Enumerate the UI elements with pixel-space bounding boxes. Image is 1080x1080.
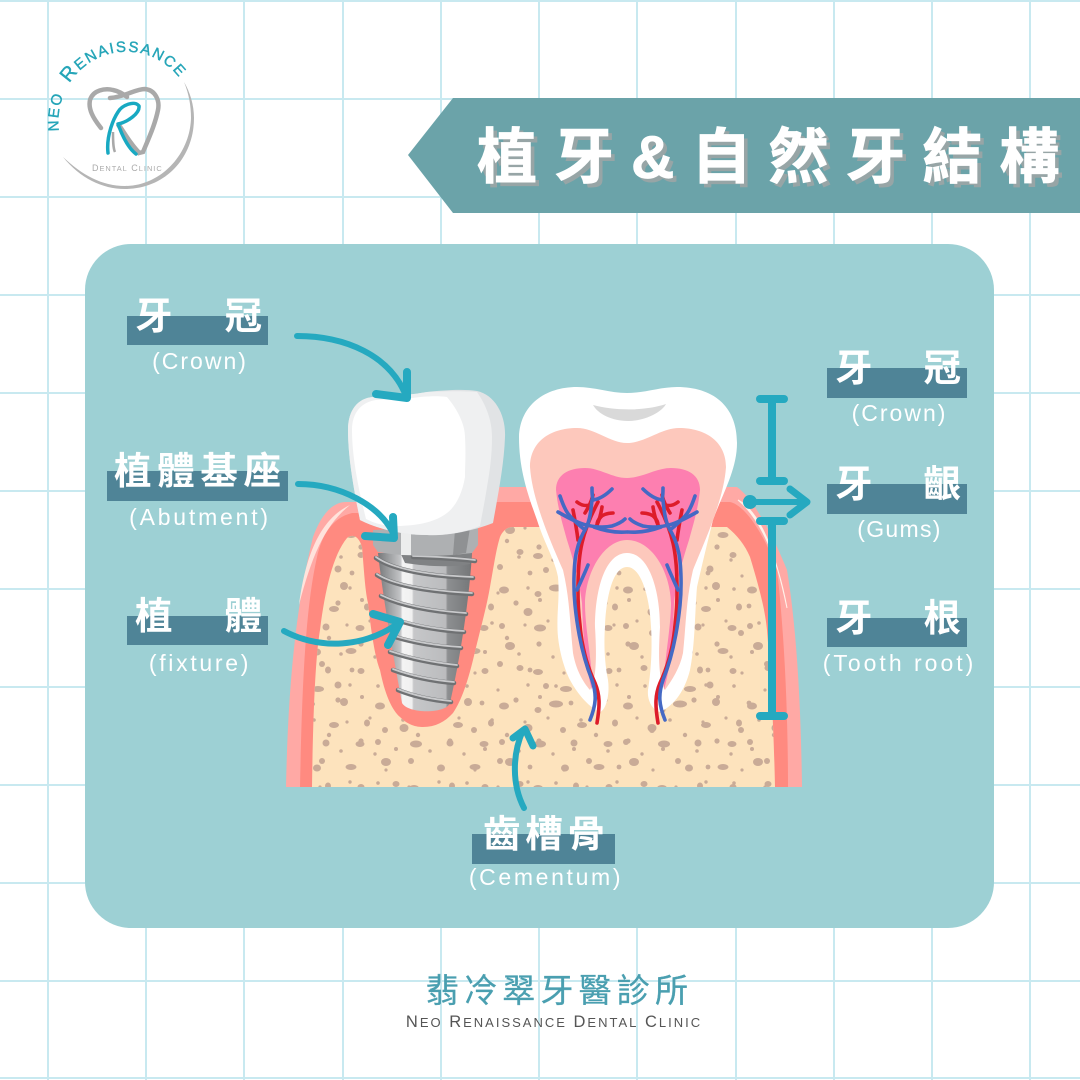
logo: Neo Renaissance Dental Clinic: NEO RENAISSANCE xyxy=(48,41,186,130)
label: cementum: 槽 xyxy=(525,813,563,855)
title banner: 植牙&自然牙結構 xyxy=(481,128,1080,195)
arrow: fixture xyxy=(284,614,400,645)
implant fixture xyxy=(376,552,475,711)
main panel xyxy=(85,244,994,928)
label: crown (right): 牙 xyxy=(835,347,872,389)
label: abutment: 體 xyxy=(157,450,195,492)
arrow: abutment xyxy=(298,484,394,538)
label: cementum: 齒 xyxy=(483,813,520,855)
label: cementum xyxy=(469,813,623,890)
label: crown (right) xyxy=(827,347,967,426)
implant abutment xyxy=(373,525,478,556)
label: tooth root xyxy=(823,597,976,676)
label: crown (right): (Crown) xyxy=(852,400,947,426)
label: cementum: 骨 xyxy=(568,813,605,855)
label: abutment xyxy=(107,450,288,530)
label: crown (right): 冠 xyxy=(924,347,961,389)
label: gums: 齦 xyxy=(924,463,961,505)
enamel xyxy=(519,387,737,712)
gum highlights xyxy=(299,505,350,605)
label: gums: (Gums) xyxy=(857,516,942,542)
pulp xyxy=(556,468,700,690)
label: gums: 牙 xyxy=(835,463,872,505)
measurement brackets xyxy=(756,395,788,720)
label: fixture: (fixture) xyxy=(149,650,251,676)
dentin xyxy=(530,428,726,690)
arrow: gums xyxy=(743,489,807,515)
label: tooth root: 根 xyxy=(924,597,961,639)
label: fixture xyxy=(127,595,268,676)
arrow: crown xyxy=(297,336,407,398)
label: abutment: 座 xyxy=(243,450,281,492)
footer: clinic name xyxy=(406,972,702,1031)
label: fixture: 體 xyxy=(224,595,262,637)
gum and bone illustration xyxy=(286,487,802,787)
occlusal shadow xyxy=(593,404,666,421)
label: tooth root: (Tooth root) xyxy=(823,650,976,676)
clinic name chinese: 翡冷翠牙醫診所 xyxy=(426,972,693,1009)
blood vessels xyxy=(558,488,697,723)
implant crown xyxy=(348,390,505,535)
label: tooth root: 牙 xyxy=(835,597,872,639)
label: abutment: 基 xyxy=(200,450,238,492)
bone xyxy=(312,527,775,787)
title banner: 植牙&自然牙結構 xyxy=(477,124,1076,191)
gum: inner layer xyxy=(300,502,788,787)
label: abutment: (Abutment) xyxy=(129,504,271,530)
label: crown (left) xyxy=(127,295,268,374)
clinic name english: NEO RENAISSANCE DENTAL CLINIC xyxy=(406,1013,702,1031)
logo: Neo Renaissance Dental Clinic: DENTAL CLINIC xyxy=(92,163,163,173)
label: abutment: 植 xyxy=(114,450,152,492)
label: gums xyxy=(827,463,967,542)
title banner xyxy=(408,98,1080,213)
logo: Neo Renaissance Dental Clinic xyxy=(48,41,194,189)
label: cementum: (Cementum) xyxy=(469,864,623,890)
label: crown (left): 冠 xyxy=(224,295,262,337)
natural tooth xyxy=(519,387,737,723)
label: crown (left): (Crown) xyxy=(152,348,248,374)
arrow: cementum xyxy=(513,729,533,808)
gum: outer layer xyxy=(286,487,802,787)
label: crown (left): 牙 xyxy=(135,295,172,337)
label: fixture: 植 xyxy=(135,595,172,637)
